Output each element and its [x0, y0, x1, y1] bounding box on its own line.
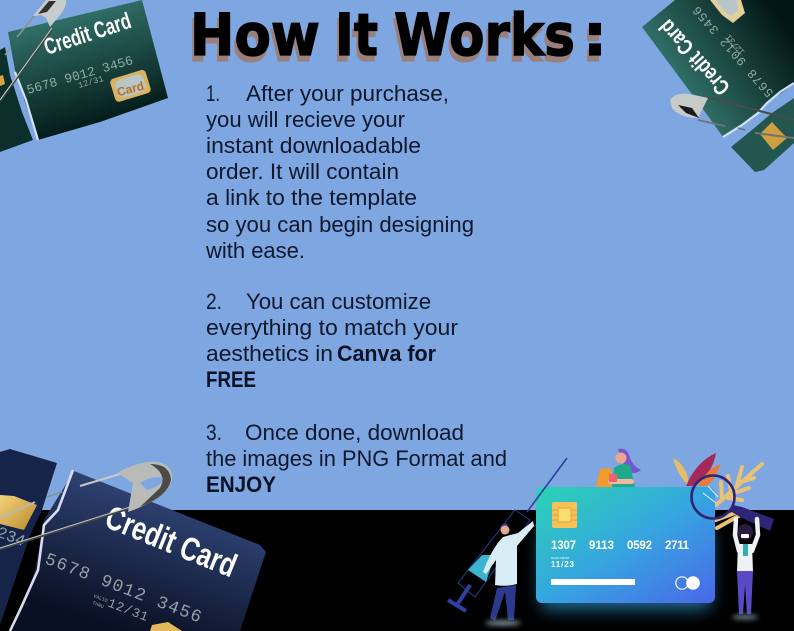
text block: step 2 — [206, 289, 459, 392]
text block: step 1 — [205, 81, 474, 263]
text block: step 1: 1. — [206, 81, 220, 106]
illustration: doctor with syringe — [448, 458, 567, 626]
title: How It Works: Works — [392, 7, 573, 75]
title: How It Works: Works — [394, 1, 575, 69]
text block: step 2: Canva for — [337, 341, 436, 366]
illustration: blue credit card with medical figures: 9113 — [589, 540, 614, 552]
card expiry: VALID FROM — [551, 556, 570, 560]
illustration: blue credit card with medical figures: 2711 — [665, 540, 690, 552]
title: How It Works: It — [335, 1, 378, 69]
card expiry — [551, 556, 575, 569]
icon: chip — [552, 502, 577, 528]
icon: card logo circles — [676, 576, 700, 590]
text block: step 2: FREE — [206, 367, 256, 392]
black footer band — [0, 510, 794, 631]
illustration: torn navy credit card, bottom left — [0, 449, 266, 631]
text block: step 1: you will recieve your — [206, 107, 405, 132]
title: How It Works: How — [190, 1, 320, 69]
title: How It Works: How — [188, 7, 318, 75]
illustration: torn navy credit card, bottom left: VALID — [92, 593, 108, 604]
illustration: decorative leaves — [673, 453, 762, 528]
illustration: torn green credit card, top right — [642, 0, 794, 172]
text block: step 1: instant downloadable — [206, 133, 421, 158]
card number: 1307 — [551, 540, 576, 552]
text block: step 2: everything to match your — [206, 315, 459, 340]
illustration: torn green credit card, top left — [0, 0, 168, 152]
icon: safety pin — [0, 462, 172, 549]
icon: chip — [760, 122, 787, 150]
text block: step 1: order. It will contain — [206, 159, 399, 184]
icon: safety pin — [0, 0, 66, 101]
text block: step 3: 3. — [206, 420, 222, 445]
illustration: blue credit card with medical figures — [448, 449, 774, 626]
text block: step 1: After your purchase, — [246, 81, 449, 106]
illustration: torn navy credit card, bottom left: Credit Card — [100, 498, 242, 584]
illustration: woman holding magnifying glass — [732, 519, 758, 620]
illustration: torn green credit card, top left: 5678 9012 3456 — [25, 53, 135, 98]
text block: step 2: aesthetics in — [206, 341, 333, 366]
text block: step 3: ENJOY — [206, 472, 276, 497]
text block: step 1: so you can begin designing — [206, 212, 474, 237]
illustration: woman on top of card — [596, 449, 641, 487]
illustration: torn green credit card, top left: Card — [115, 79, 145, 99]
illustration: torn navy credit card, bottom left: THRU — [91, 600, 105, 610]
card strip — [551, 579, 635, 585]
illustration: torn green credit card, top left: 12/31 — [77, 74, 105, 91]
illustration: torn navy credit card, bottom left: 12/31 — [106, 596, 150, 625]
illustration: blue credit card with medical figures: 0592 — [627, 540, 652, 552]
text block: step 3: Once done, download — [245, 420, 464, 445]
illustration: torn green credit card, top right: 12/31 — [724, 32, 747, 57]
icon: chip — [0, 495, 37, 530]
card glow — [540, 525, 712, 610]
illustration: torn navy credit card, bottom left: 5678 9012 3456 — [42, 550, 204, 628]
text block: step 2: You can customize — [246, 289, 431, 314]
card expiry: 11/23 — [551, 560, 575, 569]
illustration: torn green credit card, top right: 5678 9012 3456 — [690, 3, 777, 100]
text block: step 2: 2. — [206, 289, 222, 314]
text block: step 1: with ease. — [205, 238, 305, 263]
title: How It Works: It — [333, 7, 376, 75]
text block: step 1: a link to the template — [206, 185, 417, 210]
text block: step 3 — [206, 420, 507, 497]
credit card body — [536, 487, 715, 603]
title: How It Works: : — [583, 1, 607, 69]
title: How It Works: : — [581, 7, 605, 75]
illustration: magnifying glass — [692, 476, 774, 531]
title: How It Works — [188, 1, 607, 75]
icon: safety pin — [670, 94, 794, 138]
text block: step 3: the images in PNG Format and — [206, 446, 507, 471]
